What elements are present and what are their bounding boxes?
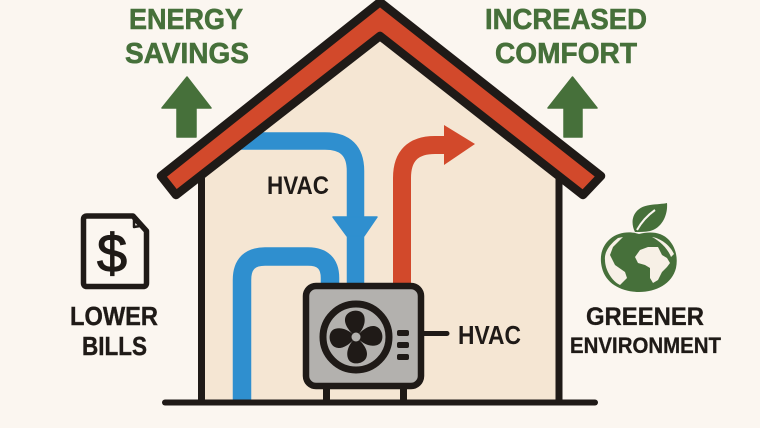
label: greener environment: GREENER (586, 303, 704, 331)
label: lower bills (70, 301, 158, 361)
icon: dollar bill document: $ (97, 224, 127, 284)
label: lower bills: BILLS (82, 331, 147, 361)
red warm air duct with arrow (402, 125, 475, 288)
icon: energy savings up arrow (162, 77, 211, 137)
label: HVAC upper: HVAC (267, 172, 329, 200)
icon: green globe with leaf (601, 203, 677, 292)
unit vents (397, 330, 409, 360)
heading: energy savings: SAVINGS (125, 38, 249, 70)
label: HVAC unit: HVAC (458, 320, 521, 350)
leaf (633, 203, 667, 232)
label: greener environment (570, 303, 722, 358)
heading: increased comfort: COMFORT (495, 38, 637, 70)
heading: energy savings (125, 4, 249, 70)
ground line (165, 400, 595, 406)
panel: house interior (201, 35, 559, 402)
heading: increased comfort: INCREASED (485, 4, 647, 36)
globe (601, 232, 677, 292)
icon: increased comfort up arrow (548, 77, 597, 137)
blue supply duct with down arrow (220, 141, 377, 288)
house walls (202, 178, 559, 402)
unit casing (306, 286, 421, 386)
continent cutouts (635, 247, 670, 283)
heading: energy savings: ENERGY (129, 4, 243, 36)
outdoor HVAC unit (306, 286, 421, 401)
label: lower bills: LOWER (70, 301, 158, 331)
heading: increased comfort (485, 4, 647, 70)
unit legs (323, 388, 407, 401)
label: greener environment: ENVIRONMENT (570, 333, 722, 358)
icon: dollar bill document (84, 216, 146, 286)
roof (161, 2, 601, 195)
blue return duct (242, 256, 330, 402)
HVAC callout line (424, 331, 447, 336)
fan icon (323, 304, 389, 370)
